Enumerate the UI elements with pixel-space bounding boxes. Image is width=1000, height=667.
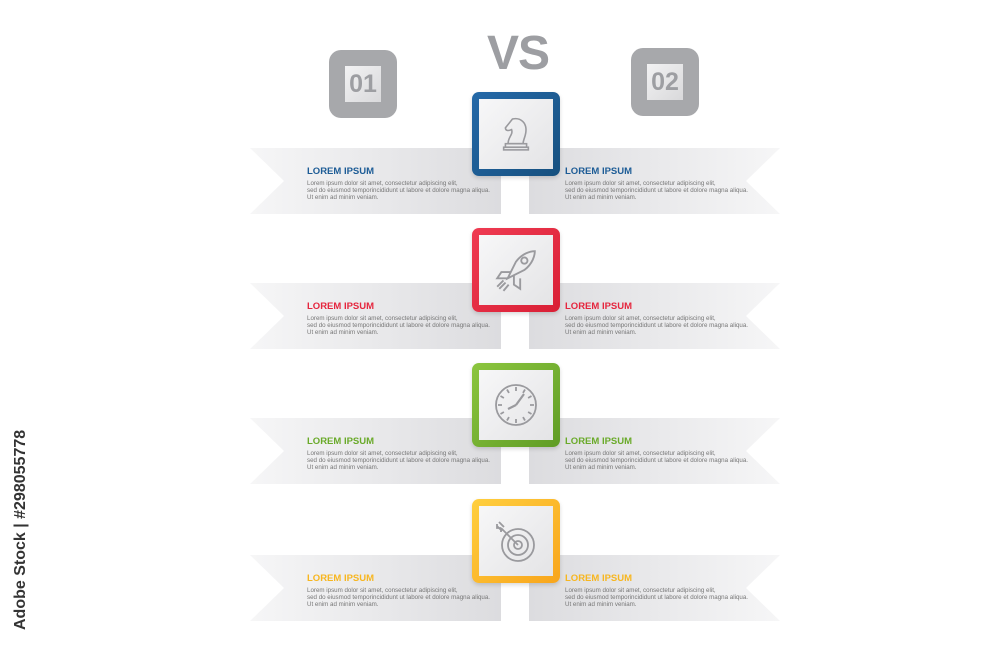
text: row 1 left bbox=[307, 166, 490, 201]
text: row 4 left: sed do eiusmod temporincididunt ut labore et dolore magna aliqua. bbox=[307, 594, 490, 601]
text: row 4 right: LOREM IPSUM bbox=[565, 573, 632, 584]
vertical stock id text: Adobe Stock | #298055778 bbox=[12, 430, 29, 630]
text: row 2 right bbox=[565, 301, 748, 336]
text: row 2 left bbox=[307, 301, 490, 336]
text: row 2 right: sed do eiusmod temporincididunt ut labore et dolore magna aliqua. bbox=[565, 322, 748, 329]
text: row 1 left: Lorem ipsum dolor sit amet, consectetur adipiscing elit, bbox=[307, 180, 458, 187]
text: row 4 left bbox=[307, 573, 490, 608]
text: row 4 left: Lorem ipsum dolor sit amet, consectetur adipiscing elit, bbox=[307, 587, 458, 594]
badge 01 bbox=[329, 50, 397, 118]
text: row 1 left: LOREM IPSUM bbox=[307, 166, 374, 177]
text: row 2 right: LOREM IPSUM bbox=[565, 301, 632, 312]
text: row 2 left: Lorem ipsum dolor sit amet, consectetur adipiscing elit, bbox=[307, 315, 458, 322]
text: row 4 left: Ut enim ad minim veniam. bbox=[307, 601, 379, 608]
text: row 3 left: sed do eiusmod temporincididunt ut labore et dolore magna aliqua. bbox=[307, 457, 490, 464]
text: row 1 right: Lorem ipsum dolor sit amet, consectetur adipiscing elit, bbox=[565, 180, 716, 187]
text: row 2 left: sed do eiusmod temporincididunt ut labore et dolore magna aliqua. bbox=[307, 322, 490, 329]
ribbon row 4 bbox=[250, 555, 780, 621]
text: row 4 right: Ut enim ad minim veniam. bbox=[565, 601, 637, 608]
icon box: target bbox=[472, 499, 560, 583]
text: row 3 right: sed do eiusmod temporincididunt ut labore et dolore magna aliqua. bbox=[565, 457, 748, 464]
text: row 4 right: sed do eiusmod temporincididunt ut labore et dolore magna aliqua. bbox=[565, 594, 748, 601]
text: row 2 right: Ut enim ad minim veniam. bbox=[565, 329, 637, 336]
text: row 3 left: LOREM IPSUM bbox=[307, 436, 374, 447]
ribbon row 3 bbox=[250, 418, 780, 484]
text: row 1 right: sed do eiusmod temporincididunt ut labore et dolore magna aliqua. bbox=[565, 187, 748, 194]
ribbon row 2 bbox=[250, 283, 780, 349]
text: row 3 right: Lorem ipsum dolor sit amet, consectetur adipiscing elit, bbox=[565, 450, 716, 457]
text: row 4 right bbox=[565, 573, 748, 608]
text: row 3 left: Lorem ipsum dolor sit amet, consectetur adipiscing elit, bbox=[307, 450, 458, 457]
text: row 4 left: LOREM IPSUM bbox=[307, 573, 374, 584]
ribbon row 1 bbox=[250, 148, 780, 214]
text: row 1 right: Ut enim ad minim veniam. bbox=[565, 194, 637, 201]
text: row 4 right: Lorem ipsum dolor sit amet, consectetur adipiscing elit, bbox=[565, 587, 716, 594]
text: row 2 left: Ut enim ad minim veniam. bbox=[307, 329, 379, 336]
title: VS: VS bbox=[487, 27, 549, 80]
text: row 1 right: LOREM IPSUM bbox=[565, 166, 632, 177]
text: row 3 left bbox=[307, 436, 490, 471]
text: row 3 right: Ut enim ad minim veniam. bbox=[565, 464, 637, 471]
text: row 3 right: LOREM IPSUM bbox=[565, 436, 632, 447]
text: row 3 left: Ut enim ad minim veniam. bbox=[307, 464, 379, 471]
icon box: clock bbox=[472, 363, 560, 447]
badge 02 bbox=[631, 48, 699, 116]
text: row 1 left: sed do eiusmod temporincididunt ut labore et dolore magna aliqua. bbox=[307, 187, 490, 194]
badge 01: 01 bbox=[349, 70, 377, 98]
text: row 2 right: Lorem ipsum dolor sit amet, consectetur adipiscing elit, bbox=[565, 315, 716, 322]
icon box: rocket bbox=[472, 228, 560, 312]
text: row 1 right bbox=[565, 166, 748, 201]
text: row 3 right bbox=[565, 436, 748, 471]
badge 02: 02 bbox=[651, 68, 679, 96]
text: row 2 left: LOREM IPSUM bbox=[307, 301, 374, 312]
text: row 1 left: Ut enim ad minim veniam. bbox=[307, 194, 379, 201]
icon box: chess knight bbox=[472, 92, 560, 176]
